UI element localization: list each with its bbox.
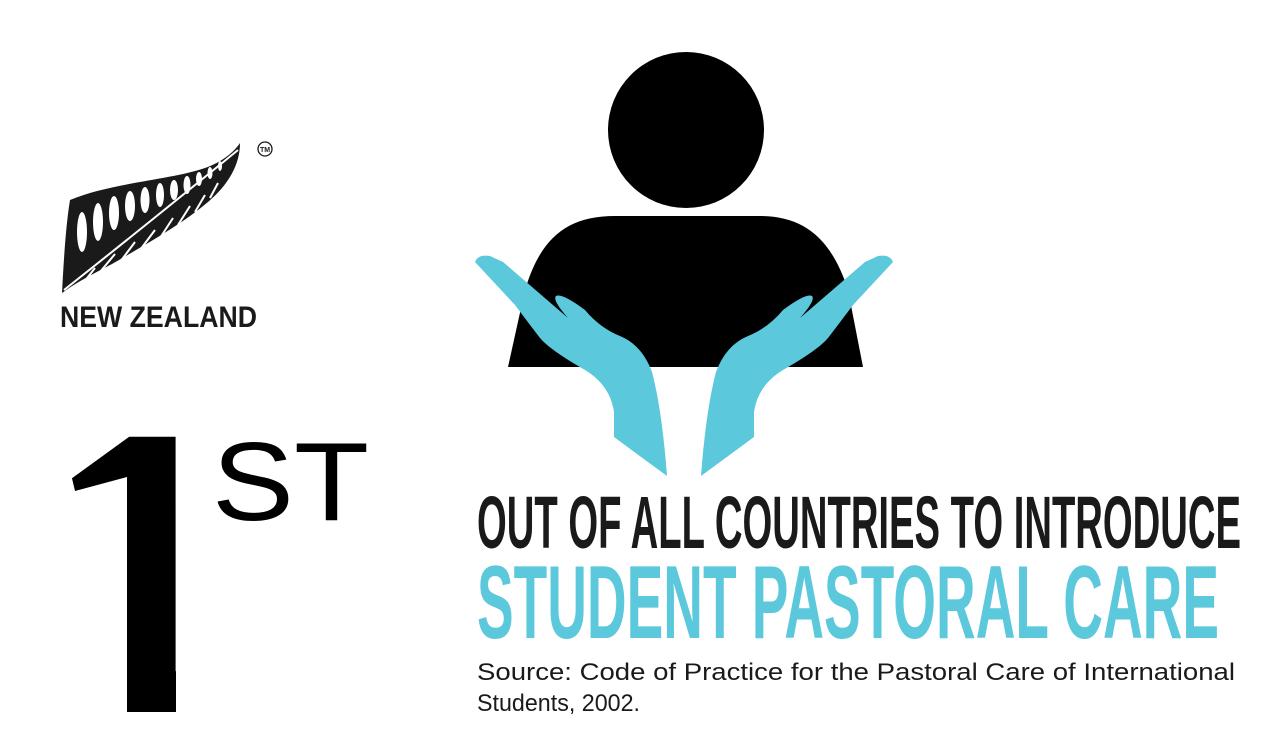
icon: trademark: TM	[260, 147, 270, 154]
big number 1st	[72, 436, 366, 712]
icon: person with hands	[475, 52, 893, 476]
source: Source: Code of Practice for the Pastoral Care of International	[477, 659, 1235, 686]
right hand	[701, 256, 893, 476]
headline	[477, 481, 1241, 661]
logo text: NEW ZEALAND	[60, 301, 257, 334]
left hand	[475, 256, 667, 476]
icon: trademark	[258, 142, 272, 156]
source	[477, 659, 1235, 717]
head	[608, 52, 764, 208]
big number 1st: ST	[212, 420, 369, 544]
body	[508, 216, 863, 367]
icon: fern	[62, 143, 240, 293]
source: Students, 2002.	[477, 690, 640, 717]
logo: New Zealand fern	[60, 142, 272, 334]
